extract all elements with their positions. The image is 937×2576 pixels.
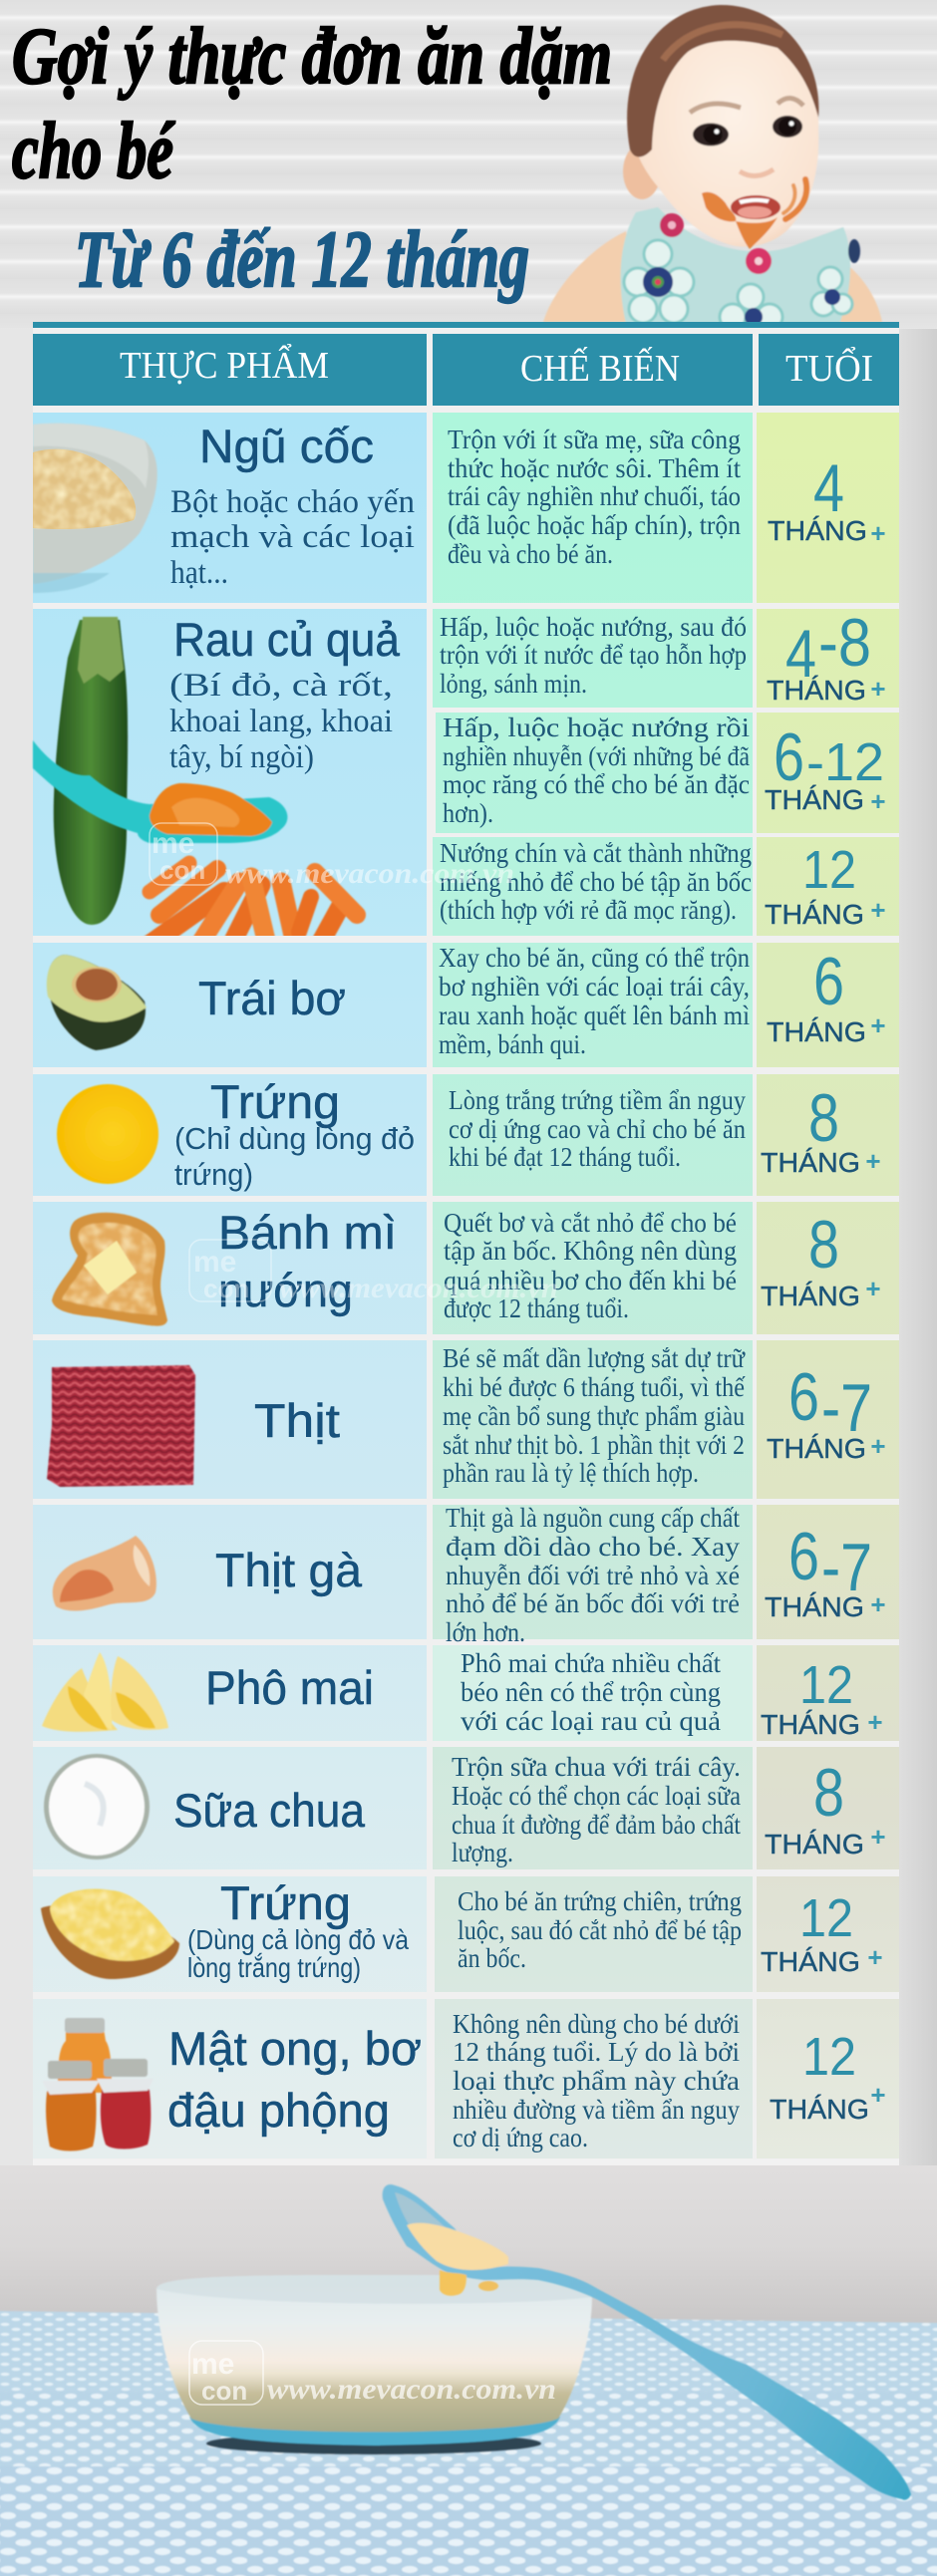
food note: ngũ cốc	[170, 484, 415, 591]
age: 12 tháng: 12	[799, 1655, 853, 1715]
age: 12 tháng: THÁNG	[761, 1946, 860, 1977]
age: 6-7 tháng: -7	[821, 1530, 872, 1605]
preparation: thịt gà: Thịt gà là nguồn cung cấp chất	[446, 1503, 740, 1533]
age: 8 tháng: 8	[808, 1207, 839, 1283]
age: 12 tháng: +	[870, 2080, 886, 2110]
table header: TUỔI	[785, 347, 873, 390]
preparation: ngũ cốc: trái cây nghiền như chuối, táo	[448, 481, 741, 511]
age: 8 tháng: 8	[813, 1755, 844, 1831]
age: 6 tháng	[767, 944, 886, 1047]
food name: rau củ quả: Rau củ quả	[173, 613, 401, 666]
age: 12 tháng: 12	[802, 840, 856, 900]
food name: sữa chua: Sữa chua	[173, 1784, 366, 1837]
row: trứng lòng đỏ	[33, 1074, 899, 1196]
preparation: thịt: phần rau là tỷ lệ thích hợp.	[443, 1458, 699, 1488]
age: 6-7 tháng: THÁNG	[767, 1433, 866, 1464]
preparation: mật ong, bơ đậu phộng: nhiều đường và tiềm ẩn nguy	[453, 2095, 740, 2125]
preparation: bánh mì nướng: được 12 tháng tuổi.	[444, 1293, 629, 1323]
age: 12 tháng: +	[867, 1942, 883, 1972]
food note: chỉ dùng lòng đỏ: (Chỉ dùng lòng đỏ	[174, 1121, 415, 1156]
icon: toast with butter	[52, 1213, 167, 1326]
age: 6-12 tháng	[765, 719, 886, 816]
food name: ngũ cốc: Ngũ cốc	[199, 420, 374, 472]
watermark: mevacon bottom: www.mevacon.com.vn	[267, 2373, 556, 2406]
age: 6-7 tháng	[767, 1359, 886, 1464]
preparation: rau củ quả 4-8 tháng	[440, 612, 747, 699]
preparation: sữa chua	[452, 1752, 741, 1867]
preparation: mật ong, bơ đậu phộng	[453, 2009, 740, 2152]
preparation: thịt gà	[446, 1503, 741, 1647]
age: 4-8 tháng: 4	[785, 616, 816, 692]
food note: ngũ cốc: hạt...	[170, 555, 228, 591]
food name: thịt: Thịt	[254, 1394, 340, 1447]
food name: mật ong, bơ đậu phộng: Mật ong, bơ	[168, 2022, 422, 2075]
preparation: mật ong, bơ đậu phộng: loại thực phẩm này chứa	[453, 2066, 740, 2096]
age: 12 tháng: +	[867, 1707, 883, 1737]
preparation: rau củ quả 6-12 tháng: Hấp, luộc hoặc nướng rồi	[443, 713, 750, 742]
preparation: trứng lòng đỏ: khi bé đạt 12 tháng tuổi.	[449, 1142, 681, 1172]
food note: ngũ cốc: mạch và các loại	[170, 519, 415, 555]
preparation: trứng lòng đỏ: cơ dị ứng cao và chỉ cho bé ăn	[449, 1114, 746, 1144]
preparation: sữa chua: chua ít đường để đảm bảo chất	[452, 1810, 741, 1840]
row: rau củ quả	[33, 605, 899, 945]
food note: rau củ quả: (Bí đỏ, cà rốt,	[169, 668, 393, 704]
age: 12 tháng	[761, 1888, 883, 1977]
food note: chỉ dùng lòng đỏ: trứng)	[174, 1157, 253, 1192]
watermark: mevacon toast row	[189, 1240, 558, 1304]
watermark: mevacon row 2: me	[152, 827, 194, 860]
preparation: sữa chua: lượng.	[452, 1838, 513, 1867]
icon: spoon with mash	[33, 740, 287, 843]
age: 4 tháng: 4	[813, 450, 844, 526]
food note: rau củ quả	[169, 668, 393, 775]
table header: THỰC PHẨM	[120, 344, 329, 387]
table header: CHẾ BIẾN	[520, 347, 680, 390]
watermark: mevacon bottom	[189, 2341, 556, 2406]
wall behind bowl	[0, 2165, 937, 2325]
table background	[33, 328, 899, 2165]
preparation: trái bơ: bơ nghiền với các loại trái cây,	[439, 972, 750, 1002]
preparation: thịt: sắt như thịt bò. 1 phần thịt với 2	[443, 1430, 745, 1460]
age: 8 tháng: +	[865, 1146, 881, 1176]
watermark: mevacon bottom: con	[201, 2376, 247, 2406]
preparation: rau củ quả 4-8 tháng: Hấp, luộc hoặc nướng, sau đó	[440, 612, 747, 642]
preparation: mật ong, bơ đậu phộng: 12 tháng tuổi. Lý do là bởi	[453, 2037, 740, 2067]
title	[12, 13, 612, 195]
age: 8 tháng: 8	[808, 1080, 839, 1156]
row: thịt gà	[33, 1503, 899, 1647]
age: 8 tháng: THÁNG	[765, 1829, 864, 1860]
age: 8 tháng: THÁNG	[761, 1147, 860, 1178]
age: 4 tháng: THÁNG	[768, 515, 867, 546]
age: 12 tháng	[765, 840, 886, 930]
preparation: phô mai: với các loại rau củ quả	[461, 1706, 721, 1736]
age: 6 tháng: +	[870, 1010, 886, 1040]
icon: yogurt bowl	[44, 1754, 150, 1860]
row: phô mai	[33, 1645, 899, 1741]
age: 8 tháng: +	[870, 1822, 886, 1852]
age: 8 tháng: THÁNG	[761, 1281, 860, 1311]
age: 8 tháng: +	[865, 1274, 881, 1303]
age: 6-7 tháng: 6	[788, 1519, 819, 1594]
age: 12 tháng: THÁNG	[765, 899, 864, 930]
age: 8 tháng	[765, 1755, 886, 1860]
preparation: bánh mì nướng: quá nhiều bơ cho đến khi bé	[444, 1266, 737, 1295]
preparation: thịt: Bé sẽ mất dần lượng sắt dự trữ	[443, 1343, 746, 1373]
food note: rau củ quả: tây, bí ngòi)	[169, 739, 314, 775]
icon: avocado	[47, 955, 147, 1050]
age: 6-7 tháng: -7	[821, 1370, 872, 1446]
age: 12 tháng: 12	[802, 2027, 856, 2087]
preparation: thịt gà: nhỏ để bé ăn bốc đối với trẻ	[446, 1588, 740, 1618]
preparation: trái bơ: Xay cho bé ăn, cũng có thể trộn	[439, 943, 750, 973]
preparation: thịt gà: đạm dồi dào cho bé. Xay	[446, 1532, 741, 1562]
watermark: mevacon row 2: www.mevacon.com.vn	[225, 857, 514, 890]
polka dot table surface	[0, 2311, 937, 2576]
preparation: ngũ cốc: thức hoặc nước sôi. Thêm ít	[448, 453, 741, 483]
preparation: ngũ cốc: (đã luộc hoặc hấp chín), trộn	[448, 510, 741, 540]
food name: bánh mì nướng: Bánh mì	[218, 1206, 397, 1259]
food name: thịt gà: Thịt gà	[215, 1544, 363, 1596]
age: 4-8 tháng: +	[870, 674, 886, 704]
food note: dùng cả lòng đỏ và lòng trắng	[187, 1924, 409, 1983]
preparation: thịt: khi bé được 6 tháng tuổi, vì thế	[443, 1372, 746, 1402]
preparation: ngũ cốc	[448, 425, 741, 569]
watermark: mevacon row 2: con	[159, 855, 205, 885]
age: 6-12 tháng: +	[870, 786, 886, 816]
food note: dùng cả lòng đỏ và lòng trắng: lòng trắng trứng)	[187, 1952, 361, 1983]
icon: cereal bowl	[33, 424, 157, 593]
preparation: thịt gà: lớn hơn.	[446, 1617, 525, 1647]
preparation: thịt: mẹ cần bổ sung thực phẩm giàu	[443, 1401, 745, 1431]
preparation: rau củ quả 12 tháng: miếng nhỏ để cho bé tập ăn bốc	[440, 867, 752, 897]
food name: phô mai: Phô mai	[205, 1661, 374, 1714]
preparation: ngũ cốc: Trộn với ít sữa mẹ, sữa công	[448, 425, 741, 454]
row: trái bơ	[33, 943, 899, 1067]
age: 6 tháng: 6	[813, 944, 844, 1019]
illustration: spoon with puree	[383, 2184, 911, 2500]
watermark: mevacon toast row: www.mevacon.com.vn	[279, 1272, 558, 1304]
preparation: trứng cả lòng: ăn bốc.	[458, 1943, 526, 1973]
age: 12 tháng	[770, 2027, 886, 2125]
title: Gợi ý thực đơn ăn dặm	[12, 13, 612, 101]
icon: carrots	[150, 863, 357, 945]
age: 6-7 tháng: +	[870, 1431, 886, 1461]
preparation: thịt gà: nhuyễn đối với trẻ nhỏ và xé	[446, 1561, 740, 1590]
age: 4-8 tháng: THÁNG	[767, 675, 866, 706]
preparation: trứng cả lòng: luộc, sau đó cắt nhỏ để bé tập	[458, 1915, 742, 1945]
icon: scrambled egg on toast	[41, 1889, 179, 1979]
preparation: thịt	[443, 1343, 746, 1488]
icon: zucchini	[54, 617, 128, 925]
food note: chỉ dùng lòng đỏ	[174, 1121, 415, 1192]
preparation: rau củ quả 4-8 tháng: lỏng, sánh mịn.	[440, 669, 587, 699]
age: 6-7 tháng	[765, 1519, 886, 1622]
row: trứng cả lòng	[33, 1876, 899, 1992]
food note: ngũ cốc: Bột hoặc cháo yến	[170, 484, 415, 520]
table header	[33, 334, 899, 406]
food name: trứng: Trứng	[210, 1075, 340, 1128]
age: 12 tháng: THÁNG	[761, 1709, 860, 1740]
watermark: mevacon toast row: con	[203, 1274, 249, 1303]
preparation: trái bơ: mềm, bánh qui.	[439, 1029, 586, 1059]
age: 6-12 tháng: -12	[806, 732, 884, 792]
preparation: rau củ quả 12 tháng: Nướng chín và cắt thành những	[440, 838, 752, 868]
preparation: bánh mì nướng: Quết bơ và cắt nhỏ để cho bé	[444, 1208, 737, 1238]
food name: bánh mì nướng: nướng	[218, 1264, 353, 1316]
preparation: sữa chua: Hoặc có thể chọn các loại sữa	[452, 1781, 741, 1811]
age: 4-8 tháng	[767, 605, 886, 706]
age: 6-7 tháng: +	[870, 1589, 886, 1619]
preparation: mật ong, bơ đậu phộng: cơ dị ứng cao.	[453, 2123, 588, 2152]
preparation: trứng lòng đỏ: Lòng trắng trứng tiềm ẩn nguy	[449, 1085, 746, 1115]
preparation: mật ong, bơ đậu phộng: Không nên dùng cho bé dưới	[453, 2009, 740, 2039]
preparation: bánh mì nướng: tập ăn bốc. Không nên dùng	[444, 1236, 737, 1266]
food note: rau củ quả: khoai lang, khoai	[169, 704, 393, 739]
age: 4 tháng: +	[870, 518, 886, 548]
age: 12 tháng: +	[870, 895, 886, 925]
age: 6-7 tháng: THÁNG	[765, 1591, 864, 1622]
icon: egg yolk	[57, 1084, 158, 1184]
food note: dùng cả lòng đỏ và lòng trắng: (Dùng cả lòng đỏ và	[187, 1924, 409, 1955]
watermark: mevacon toast row: me	[193, 1246, 236, 1279]
preparation: trứng lòng đỏ	[449, 1085, 746, 1172]
food name: trứng: Trứng	[220, 1876, 351, 1929]
age: 4-8 tháng: -8	[818, 605, 871, 681]
preparation: trái bơ: rau xanh hoặc quết lên bánh mì	[439, 1001, 750, 1030]
preparation: trứng cả lòng	[458, 1886, 742, 1973]
row: thịt	[33, 1340, 899, 1499]
illustration: bowl	[156, 2275, 592, 2454]
watermark: mevacon row 2	[150, 823, 514, 890]
watermark: mevacon bottom: me	[191, 2348, 234, 2381]
preparation: rau củ quả 6-12 tháng: hơn).	[443, 798, 493, 828]
illustration: baby with food on face	[543, 5, 882, 330]
preparation: rau củ quả 6-12 tháng: nghiền nhuyễn (với những bé đã	[443, 741, 750, 771]
icon: jars	[42, 2018, 154, 2150]
subtitle: age range: Từ 6 đến 12 tháng	[75, 216, 529, 304]
preparation: rau củ quả 12 tháng: (thích hợp với rẻ đã mọc răng).	[440, 895, 737, 925]
age: 6 tháng: THÁNG	[767, 1016, 866, 1047]
food name: mật ong, bơ đậu phộng	[167, 2022, 422, 2137]
age: 4 tháng	[768, 450, 886, 548]
icon: cheese slices	[42, 1652, 168, 1732]
preparation: phô mai: béo nên có thể trộn cùng	[461, 1677, 721, 1707]
food name: mật ong, bơ đậu phộng: đậu phộng	[167, 2084, 390, 2137]
table end bar	[33, 2159, 899, 2165]
preparation: trứng cả lòng: Cho bé ăn trứng chiên, trứng	[458, 1886, 742, 1916]
icon: minced meat	[47, 1365, 195, 1487]
row: mật ong, bơ đậu phộng	[33, 1999, 899, 2158]
preparation: ngũ cốc: đều và cho bé ăn.	[448, 539, 613, 569]
row: bánh mì nướng	[33, 1202, 899, 1334]
age: 8 tháng	[761, 1207, 881, 1311]
age: 12 tháng: 12	[799, 1888, 853, 1948]
age: 6-7 tháng: 6	[788, 1359, 819, 1435]
row: sữa chua	[33, 1747, 899, 1869]
row: ngũ cốc	[33, 413, 899, 603]
icon: chicken piece	[53, 1536, 156, 1610]
preparation: phô mai	[461, 1648, 721, 1736]
table top bar	[33, 322, 899, 328]
preparation: rau củ quả 6-12 tháng	[443, 713, 750, 828]
age: 12 tháng: THÁNG	[770, 2094, 869, 2125]
age: 8 tháng	[761, 1080, 881, 1178]
preparation: rau củ quả 6-12 tháng: mọc răng có thể cho bé ăn đặc	[443, 769, 750, 799]
preparation: rau củ quả 4-8 tháng: trộn với ít nước để tạo hỗn hợp	[440, 640, 747, 670]
preparation: rau củ quả 12 tháng	[440, 838, 752, 925]
preparation: sữa chua: Trộn sữa chua với trái cây.	[452, 1752, 741, 1782]
food name: bánh mì nướng	[218, 1206, 397, 1316]
food name: trái bơ: Trái bơ	[198, 972, 346, 1024]
age: 6-12 tháng: THÁNG	[765, 784, 864, 815]
preparation: phô mai: Phô mai chứa nhiều chất	[461, 1648, 721, 1678]
title: cho bé	[12, 108, 175, 195]
preparation: trái bơ	[439, 943, 750, 1059]
preparation: bánh mì nướng	[444, 1208, 737, 1323]
age: 12 tháng	[761, 1655, 883, 1740]
age: 6-12 tháng: 6	[774, 719, 804, 795]
